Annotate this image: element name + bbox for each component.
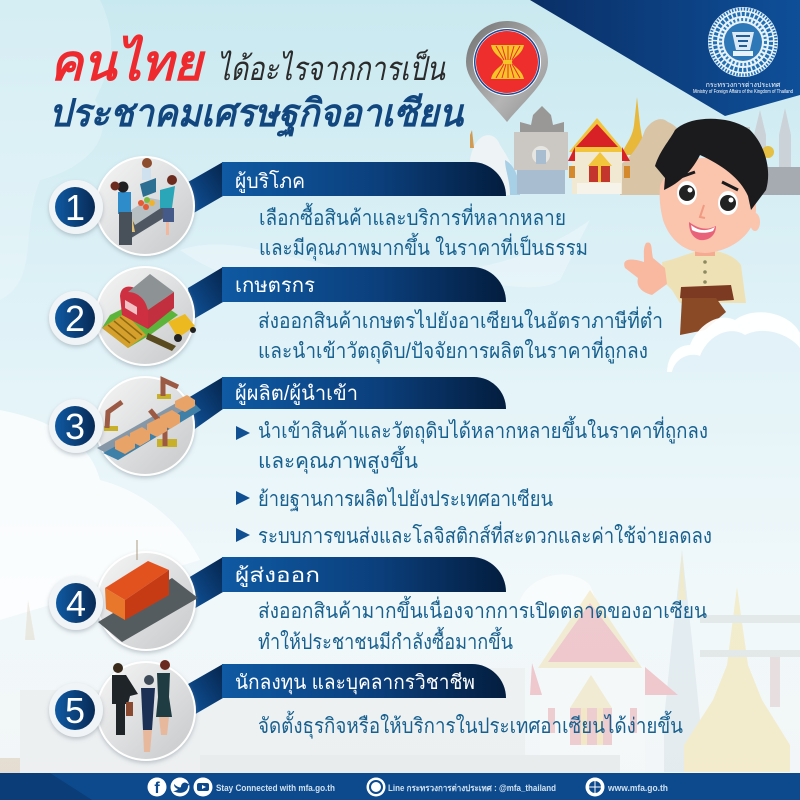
petronas towers (725, 108, 800, 195)
bullet arrow (236, 528, 250, 542)
neck (695, 238, 715, 256)
illustration: business people (97, 660, 195, 760)
shirt (662, 250, 746, 303)
social icons (148, 778, 212, 797)
bullet list: ย้ายฐานการผลิตไปยังประเทศอาเซียน (258, 487, 553, 511)
panel 5: investors and professionals (49, 660, 683, 760)
heading: ผู้ส่งออก (235, 565, 320, 588)
ministry seal logo (693, 7, 793, 95)
panel 1: consumers (49, 157, 588, 261)
body text: และนำเข้าวัตถุดิบ/ปัจจัยการผลิตในราคาที่ถูกลง (258, 336, 648, 364)
bullet list: ระบบการขนส่งและโลจิสติกส์ที่สะดวกและค่าใช้จ่ายลดลง (258, 521, 712, 548)
landmarks skyline (470, 97, 800, 195)
ear (750, 213, 760, 231)
body text: และมีคุณภาพมากขึ้น ในราคาที่เป็นธรรม (259, 233, 588, 261)
top-right navy triangle (530, 0, 800, 116)
pointing hand (624, 242, 667, 295)
website: www.mfa.go.th (607, 783, 668, 793)
panel 4: exporters (49, 540, 707, 654)
number badge (49, 291, 103, 345)
merlion statue (470, 130, 520, 195)
illustration: cargo container (97, 540, 198, 650)
grey monument (514, 106, 568, 194)
bullet arrow (236, 426, 250, 440)
golden stupa (622, 97, 645, 155)
panel 3: producers and importers (49, 377, 712, 548)
eyebrows (678, 172, 738, 190)
cartoon character (624, 119, 768, 335)
heading: ผู้ผลิต/ผู้นำเข้า (235, 383, 358, 406)
ministry name: กระทรวงการต่างประเทศ (706, 82, 781, 89)
face (660, 158, 756, 253)
number badge (49, 180, 103, 234)
bullet list: และคุณภาพสูงขึ้น (258, 446, 418, 474)
body text: ทำให้ประชาชนมีกำลังซื้อมากขึ้น (258, 627, 513, 654)
bullet list: นำเข้าสินค้าและวัตถุดิบได้หลากหลายขึ้นในราคาที่ถูกลง (258, 416, 708, 444)
background clouds (0, 0, 600, 620)
ASEAN map pin (466, 21, 548, 122)
illustration: factory conveyor (96, 377, 201, 475)
body text (258, 596, 707, 654)
number badge: 1 (65, 187, 85, 228)
nose (700, 205, 705, 218)
number badge (49, 683, 103, 737)
title line two: ประชาคมเศรษฐกิจอาเซียน (49, 93, 465, 138)
ribbon (188, 664, 506, 716)
illustration: farm (96, 267, 196, 365)
number badge: 5 (65, 690, 85, 731)
web icon (586, 778, 604, 796)
body text: จัดตั้งธุรกิจหรือให้บริการในประเทศอาเซียนได้ง่ายขึ้น (258, 711, 683, 739)
line icon (366, 778, 386, 796)
title red word: คนไทย (50, 34, 207, 91)
heading: นักลงทุน และบุคลากรวิชาชีพ (235, 672, 475, 695)
heading: เกษตรกร (235, 275, 315, 297)
panel 2: farmers (49, 267, 663, 365)
sash and trousers (680, 285, 734, 302)
bullet list (236, 416, 712, 548)
line account: Line กระทรวงการต่างประเทศ : @mfa_thailand (388, 783, 556, 793)
number badge: 2 (65, 298, 85, 339)
body text: ส่งออกสินค้าเกษตรไปยังอาเซียนในอัตราภาษีที่ต่ำ (258, 306, 663, 333)
title (49, 34, 465, 138)
eyes (677, 181, 738, 215)
body text (259, 203, 588, 261)
number badge (49, 399, 103, 453)
body text (258, 306, 663, 364)
social icons: f (154, 780, 160, 797)
hair (655, 119, 768, 210)
body text: เลือกซื้อสินค้าและบริการที่หลากหลาย (259, 203, 566, 230)
heading: ผู้บริโภค (235, 170, 305, 194)
bullet arrow (236, 491, 250, 505)
number badge: 4 (66, 583, 86, 624)
ribbon (188, 162, 506, 214)
footer bar (0, 773, 800, 800)
ribbon (188, 557, 506, 610)
body text: ส่งออกสินค้ามากขึ้นเนื่องจากการเปิดตลาดของอาเซียน (258, 596, 707, 623)
number badge (49, 576, 103, 630)
ribbon (188, 377, 506, 431)
ribbon (188, 267, 506, 320)
illustration: market stall (96, 157, 194, 255)
Thai pavilion (568, 118, 630, 194)
buttons (703, 260, 707, 284)
watermark: temple skyline (0, 550, 800, 773)
stay connected: Stay Connected with mfa.go.th (216, 783, 335, 793)
title dark words: ได้อะไรจากการเป็น (217, 49, 446, 87)
mouth (689, 222, 716, 240)
number badge: 3 (65, 406, 85, 447)
cloud over character (667, 312, 800, 372)
stone temple (620, 119, 690, 195)
